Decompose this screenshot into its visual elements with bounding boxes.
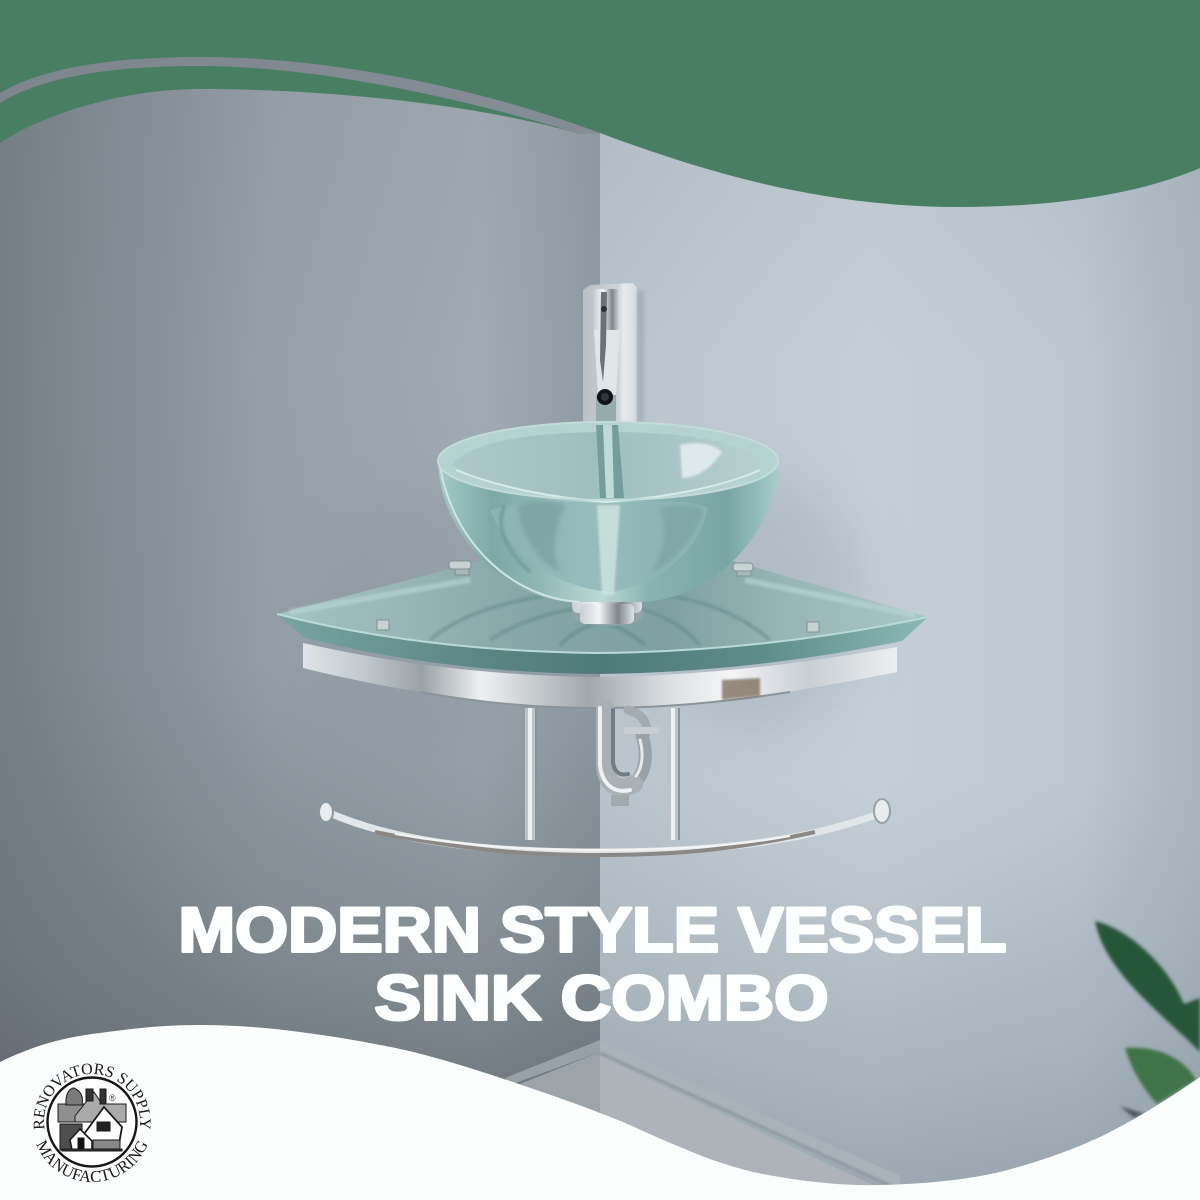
glass vessel bowl xyxy=(438,422,778,626)
grey swoosh band xyxy=(0,57,600,134)
green wave header xyxy=(0,0,1200,207)
registered mark: ® xyxy=(109,1093,116,1103)
rail lower edge xyxy=(420,692,790,708)
shelf ripples xyxy=(290,580,915,645)
company logo xyxy=(34,1063,151,1182)
faucet wall plate xyxy=(583,283,644,425)
white wave footer xyxy=(0,1025,1200,1200)
glass shelf top xyxy=(277,561,928,653)
upper leaf xyxy=(1095,921,1200,1052)
logo curved text bottom: MANUFACTURING xyxy=(36,1139,147,1182)
logo house illustration xyxy=(58,1088,126,1151)
chrome support rail xyxy=(303,643,897,708)
title line 1: MODERN STYLE VESSEL xyxy=(178,896,1006,966)
baseboard trim xyxy=(500,1040,900,1198)
rail reflection xyxy=(722,678,760,700)
P-trap drain xyxy=(600,708,659,806)
shadow leaf xyxy=(1120,1106,1145,1118)
chrome faucet xyxy=(594,289,620,425)
lower leaf xyxy=(1125,1048,1196,1104)
towel bar xyxy=(319,799,890,855)
plant leaves xyxy=(1095,921,1200,1118)
logo ring xyxy=(48,1078,136,1166)
title line 2: SINK COMBO xyxy=(374,964,828,1034)
photo: glass vessel sink combo xyxy=(277,283,928,855)
shelf standoff bolts xyxy=(364,561,838,652)
logo curved text top: RENOVATORS SUPPLY xyxy=(34,1063,151,1130)
title xyxy=(178,896,1006,1034)
support posts xyxy=(525,708,680,840)
glass shelf front edge xyxy=(277,614,928,674)
